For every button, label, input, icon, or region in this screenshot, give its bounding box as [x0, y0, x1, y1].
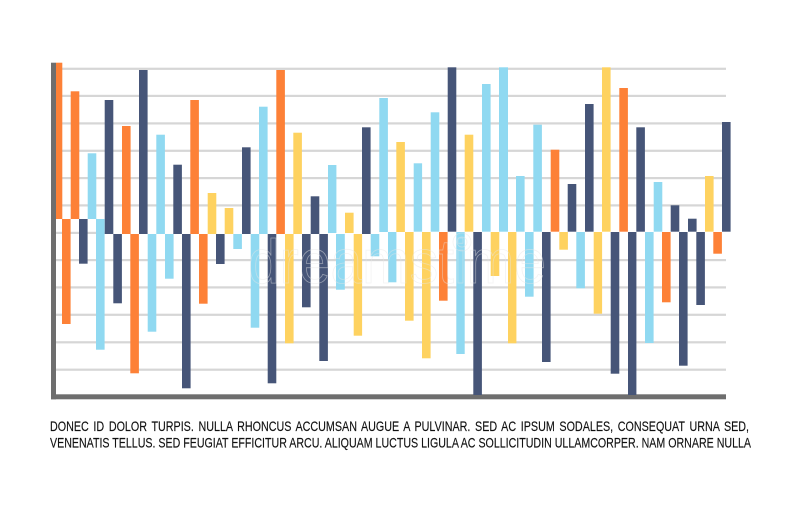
upward bars [56, 63, 731, 234]
chart grid lines [56, 68, 726, 371]
downward bars [62, 219, 722, 395]
chart axes [51, 63, 726, 399]
caption text [50, 418, 752, 451]
watermark: dreamstime [248, 228, 546, 297]
